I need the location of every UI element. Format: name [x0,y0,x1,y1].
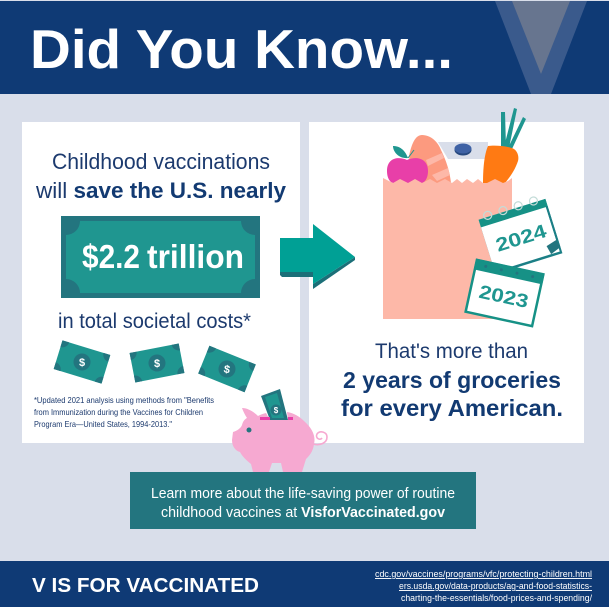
footer brand: V IS FOR VACCINATED [32,575,259,597]
footer band [0,561,609,607]
small dollar bill 3 [198,346,256,392]
groceries text: That's more than [375,340,528,363]
pig eye [246,428,252,432]
icon: calendar 2024: 2024 [493,221,550,257]
savings heading: will save the U.S. nearly [35,178,287,203]
groceries text: for every American. [341,395,563,421]
footnote: from Immunization during the Vaccines for Children [34,407,203,417]
coin slot [260,417,293,420]
call to action [130,472,476,529]
icon: grocery bag [383,108,526,319]
panel: groceries [309,122,584,443]
small dollar bill 2 [130,344,184,382]
footnote: *Updated 2021 analysis using methods from "Benefits [34,395,214,405]
footer sources: cdc.gov/vaccines/programs/vfc/protecting-children.html [375,569,592,580]
call to action: Learn more about the life-saving power of routine [151,485,455,502]
milk carton [438,142,488,183]
panel: savings [22,122,300,443]
icon: calendar 2023 [465,259,545,326]
large dollar bill: trillion [147,238,244,275]
pig body [232,408,315,472]
small dollar bill 2: $ [154,358,160,370]
title: Did You Know... [30,18,453,80]
groceries text: 2 years of groceries [343,367,561,393]
small dollar bill 1 [54,340,110,384]
large dollar bill: $2.2 [82,238,140,275]
societal costs text: in total societal costs* [58,310,251,333]
baguette [409,135,451,183]
tail [313,432,327,445]
icon: calendar 2024 [477,194,562,274]
groceries text [341,340,563,421]
savings heading [35,149,287,203]
icon: calendar 2023: 2023 [477,282,530,313]
footer sources: ers.usda.gov/data-products/ag-and-food-statistics- [399,581,592,592]
apple [387,146,428,183]
icon: piggy bank [232,389,327,472]
small dollar bill 1: $ [79,357,85,369]
carrot [483,108,526,183]
header band [0,1,609,94]
footer sources: charting-the-essentials/food-prices-and-spending/ [401,593,592,604]
footer sources [375,569,592,604]
large dollar bill [61,216,260,298]
bill in slot: $ [274,406,279,415]
arrow [280,224,355,289]
footnote: Program Era—United States, 1994-2013." [34,419,172,429]
savings heading: Childhood vaccinations [52,149,270,174]
footnote [34,395,214,429]
small dollar bill 3: $ [223,364,231,376]
paper bag [383,178,512,319]
call to action: childhood vaccines at VisforVaccinated.gov [161,504,446,521]
